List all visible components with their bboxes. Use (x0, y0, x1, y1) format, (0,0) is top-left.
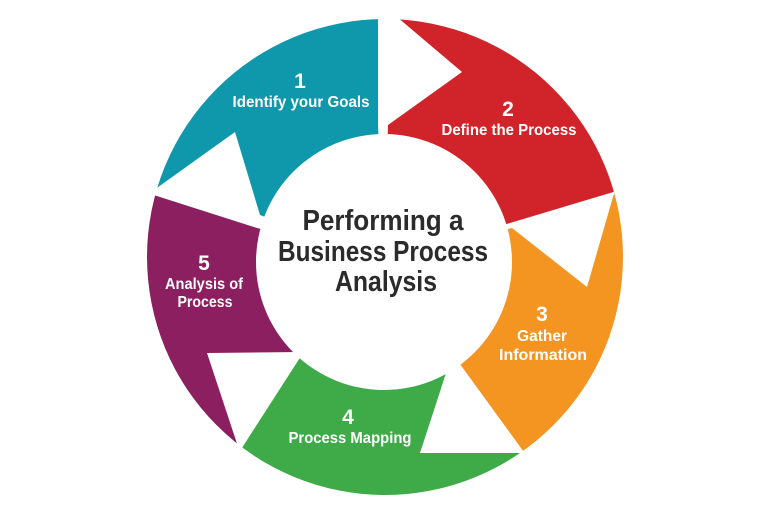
label 3 (499, 303, 587, 364)
label 2: 2 (502, 98, 514, 121)
label 4: Process Mapping (288, 430, 412, 447)
center circle (256, 134, 512, 390)
label 1: 1 (294, 70, 306, 93)
segment 3: gather information (460, 192, 623, 451)
label 1: Identify your Goals (232, 94, 370, 111)
segment 2: define process (388, 20, 614, 224)
label 2: Define the Process (442, 122, 577, 139)
center title: Analysis (335, 266, 437, 298)
label 5: Process (178, 294, 233, 311)
label 3: Gather (517, 328, 567, 345)
label 3: 3 (536, 303, 548, 326)
center title (278, 205, 488, 298)
label 5: Analysis of (165, 276, 244, 293)
label 2 (442, 98, 577, 139)
segment 4: process mapping (242, 358, 520, 495)
segment 1: identify goals (157, 19, 378, 217)
label 5: 5 (198, 252, 210, 275)
label 4 (288, 406, 412, 447)
center title: Business Process (278, 236, 488, 268)
cycle diagram (147, 19, 623, 495)
label 3: Information (499, 347, 587, 364)
label 4: 4 (342, 406, 354, 429)
center title: Performing a (302, 205, 464, 237)
label 5 (165, 252, 244, 311)
segment 5: analysis of process (147, 196, 294, 444)
label 1 (232, 70, 370, 111)
